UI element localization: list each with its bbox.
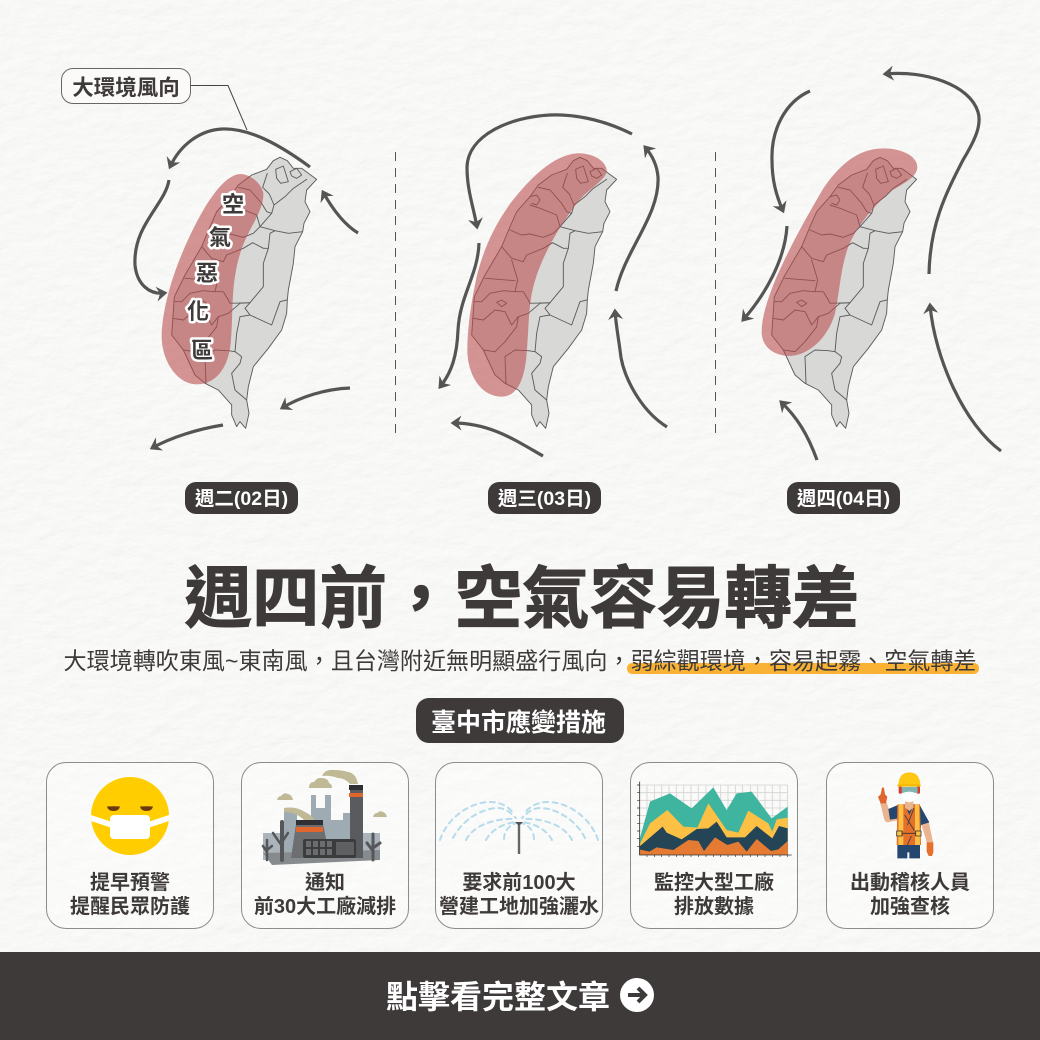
card 1 text xyxy=(70,872,190,918)
zone label: 空氣惡化區: 氣 xyxy=(209,225,231,250)
zone label: 空氣惡化區: 空 xyxy=(222,192,244,217)
date pill: Tuesday: 週二(02日) xyxy=(195,488,288,510)
date pill: Thursday: 週四(04日) xyxy=(797,488,890,510)
title: 週四前，空氣容易轉差 xyxy=(184,562,860,636)
card 2 text xyxy=(254,872,396,918)
section heading pill xyxy=(416,698,624,743)
icon: sprinkler xyxy=(440,802,598,854)
map 1: Tuesday xyxy=(135,129,358,448)
subtitle: 大環境轉吹東風~東南風，且台灣附近無明顯盛行風向，弱綜觀環境，容易起霧、空氣轉差 xyxy=(64,648,976,674)
Taiwan map 1 xyxy=(172,157,317,428)
card 1 text: 提早預警 xyxy=(90,872,170,894)
pollution zone 2 xyxy=(467,153,607,397)
wind arrows 3 xyxy=(743,73,1001,460)
wind direction label: 大環境風向 xyxy=(72,76,180,100)
footer bar xyxy=(0,952,1040,1040)
card 2 text: 前30大工廠減排 xyxy=(254,896,396,918)
leader line from wind label xyxy=(191,86,247,130)
card 5: inspectors xyxy=(826,762,994,929)
footer call to action text: 點擊看完整文章 xyxy=(386,979,610,1015)
card 1: early warning xyxy=(46,762,214,929)
card 3 text: 營建工地加強灑水 xyxy=(439,896,599,918)
date pill: Tuesday xyxy=(185,482,298,514)
pollution zone 1 xyxy=(162,174,263,384)
wind arrows 2 xyxy=(440,115,667,456)
map 3: Thursday xyxy=(743,73,1001,460)
zone label: 空氣惡化區: 化 xyxy=(187,299,209,324)
card 4 text: 監控大型工廠 xyxy=(654,872,774,894)
icon: masked face xyxy=(88,777,172,855)
card 4 text: 排放數據 xyxy=(674,896,754,918)
card 2: factory emission reduction xyxy=(241,762,409,929)
card 3: construction sprinkling xyxy=(435,762,603,929)
date pill: Wednesday xyxy=(488,482,601,514)
icon: factory xyxy=(263,770,387,865)
zone label: 空氣惡化區: 區 xyxy=(191,338,213,363)
section heading pill: 臺中市應變措施 xyxy=(431,708,606,736)
wind direction label xyxy=(61,68,191,104)
Taiwan map 2 xyxy=(472,157,617,428)
icon: inspector xyxy=(878,772,933,858)
card 2 text: 通知 xyxy=(305,872,345,894)
card 3 text xyxy=(439,872,599,918)
zone label: 空氣惡化區 xyxy=(187,192,244,363)
wind arrows 1 xyxy=(135,129,358,448)
card 5 text: 出動稽核人員 xyxy=(850,872,970,894)
date pill: Wednesday: 週三(03日) xyxy=(498,488,591,510)
pollution zone 3 xyxy=(762,148,917,356)
card icons xyxy=(91,770,934,865)
map 2: Wednesday xyxy=(440,115,667,456)
highlight under subtitle xyxy=(627,663,979,674)
zone label: 空氣惡化區: 惡 xyxy=(196,261,218,286)
date pill: Thursday xyxy=(787,482,900,514)
card 5 text xyxy=(850,872,970,918)
card 4: monitoring data xyxy=(630,762,798,929)
icon: area chart xyxy=(637,782,792,857)
card 1 text: 提醒民眾防護 xyxy=(70,896,190,918)
icon: arrow in circle xyxy=(620,978,654,1012)
card 5 text: 加強查核 xyxy=(870,896,950,918)
card 4 text xyxy=(654,872,774,918)
card 3 text: 要求前100大 xyxy=(462,872,576,894)
Taiwan map 3 xyxy=(772,157,917,428)
